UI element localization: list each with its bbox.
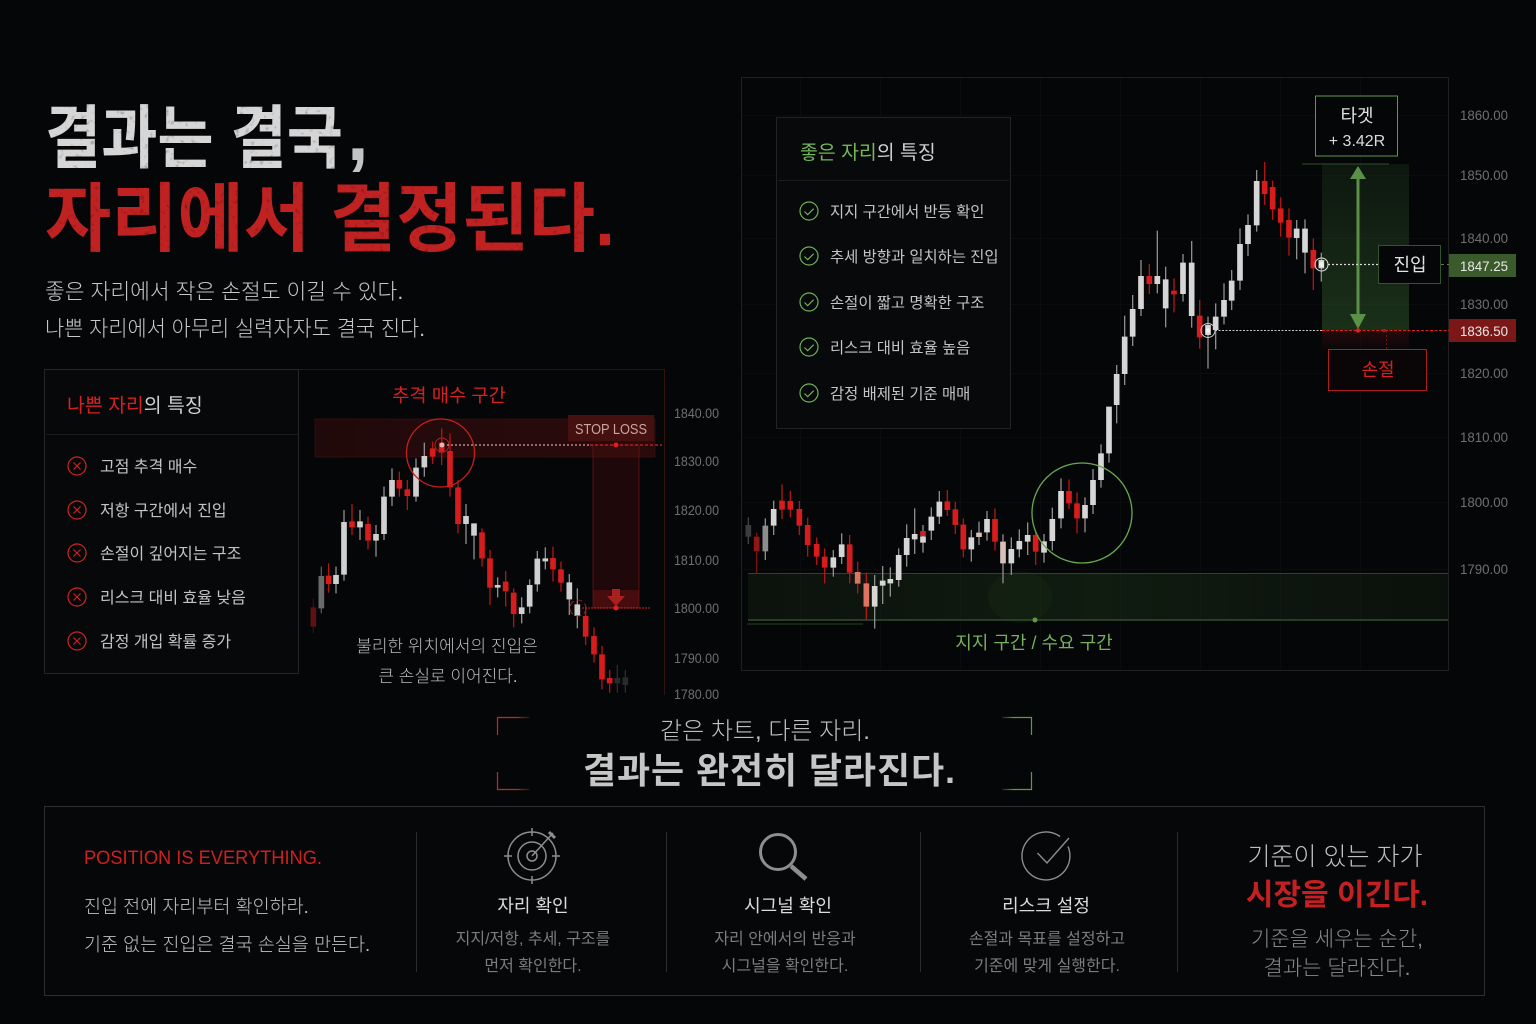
caption — [356, 637, 538, 686]
icon: target — [504, 828, 560, 884]
subtitle text: 나쁜 자리에서 아무리 실력자자도 결국 진다. — [45, 317, 425, 341]
bad traits list: 감정 개입 확률 증가 — [100, 633, 231, 651]
position message: 진입 전에 자리부터 확인하라. — [84, 896, 309, 917]
bad traits list: 리스크 대비 효율 낮음 — [100, 589, 246, 607]
right price axis: 1860.00 — [1460, 107, 1508, 123]
step: position: 자리 확인 — [497, 896, 569, 916]
caption: 불리한 위치에서의 진입은 — [356, 637, 538, 656]
closing message: 기준을 세우는 순간, — [1251, 928, 1423, 951]
closing message — [1246, 843, 1428, 980]
right price axis: 1820.00 — [1460, 365, 1508, 381]
target box: 타겟 — [1340, 106, 1374, 126]
entry marker and stop line — [406, 419, 662, 616]
title: 결과는 결국 — [45, 100, 343, 177]
bad traits list: 손절이 깊어지는 구조 — [100, 545, 241, 563]
icon: check — [1022, 832, 1070, 880]
position message: POSITION IS EVERYTHING. — [84, 848, 322, 869]
closing message: 기준이 있는 자가 — [1248, 843, 1422, 871]
right price axis: 1800.00 — [1460, 494, 1508, 510]
grid — [742, 78, 1448, 670]
good traits list: 리스크 대비 효율 높음 — [830, 339, 970, 357]
center statement — [498, 718, 1032, 791]
target box: + 3.42R — [1329, 133, 1385, 150]
heading: 나쁜 자리의 특징 — [67, 395, 203, 417]
bad traits list: 저항 구간에서 진입 — [100, 502, 227, 520]
stop box — [1328, 350, 1426, 390]
statement line 1: 같은 차트, 다른 자리. — [660, 718, 870, 745]
step: position: 먼저 확인한다. — [484, 957, 582, 975]
chart frame — [299, 370, 664, 695]
price tag: entry — [1449, 254, 1516, 277]
caption: 큰 손실로 이어진다. — [378, 667, 518, 686]
left price axis — [674, 405, 719, 702]
left price axis: 1780.00 — [674, 686, 719, 702]
green circle highlight — [1032, 463, 1132, 563]
stop loss tag — [568, 415, 654, 441]
step: risk: 리스크 설정 — [1002, 896, 1090, 916]
title: 자리에서 결정된다. — [45, 177, 615, 261]
closing message: 결과는 달라진다. — [1264, 957, 1410, 980]
good traits list: 감정 배제된 기준 매매 — [830, 385, 970, 403]
price tag: stop — [1449, 319, 1516, 342]
entry box — [1378, 246, 1440, 284]
step: signal: 자리 안에서의 반응과 — [714, 930, 856, 948]
bad traits list: 고점 추격 매수 — [100, 458, 197, 476]
right price axis: 1830.00 — [1460, 296, 1508, 312]
heading: 좋은 자리의 특징 — [800, 142, 936, 164]
step: position — [456, 896, 610, 975]
stop box: 손절 — [1361, 360, 1395, 380]
left price axis: 1840.00 — [674, 405, 719, 421]
panel: good position traits — [776, 118, 1010, 428]
left price axis: 1790.00 — [674, 650, 719, 666]
corner brackets: red — [498, 718, 530, 790]
good traits list: 추세 방향과 일치하는 진입 — [830, 248, 999, 266]
left price axis: 1810.00 — [674, 552, 719, 568]
step: position: 지지/저항, 추세, 구조를 — [456, 930, 610, 948]
position message — [84, 848, 370, 955]
right price axis: 1840.00 — [1460, 230, 1508, 246]
support zone label: 지지 구간 / 수요 구간 — [955, 633, 1113, 653]
position message: 기준 없는 진입은 결국 손실을 만든다. — [84, 934, 370, 955]
step: signal: 시그널을 확인한다. — [722, 957, 848, 975]
chase-buy label: 추격 매수 구간 — [392, 385, 506, 406]
subtitle text: 좋은 자리에서 작은 손절도 이길 수 있다. — [45, 280, 403, 304]
icon: green checks — [800, 202, 818, 402]
good traits list: 지지 구간에서 반등 확인 — [830, 203, 984, 221]
right price axis: 1790.00 — [1460, 561, 1508, 577]
left price axis: 1820.00 — [674, 502, 719, 518]
stop-loss risk block — [593, 445, 639, 608]
good traits list — [830, 203, 999, 403]
entry box: 진입 — [1393, 255, 1427, 275]
candlesticks: upper section — [1117, 162, 1321, 423]
right price axis: 1810.00 — [1460, 429, 1508, 445]
arrow: target range — [1302, 164, 1389, 329]
left price axis: 1800.00 — [674, 600, 719, 616]
arrow: stop-loss direction — [607, 589, 625, 606]
title — [45, 89, 615, 261]
price tag: stop: 1836.50 — [1460, 323, 1508, 339]
left price axis: 1830.00 — [674, 453, 719, 469]
price tag: entry: 1847.25 — [1460, 258, 1508, 274]
title: , — [347, 89, 369, 177]
panel: bad position traits — [44, 370, 298, 674]
panel: bottom summary — [44, 806, 1484, 996]
resistance band — [315, 419, 655, 457]
corner brackets: green — [1002, 718, 1032, 790]
candlesticks: falling trend — [313, 428, 625, 693]
bad traits list — [100, 458, 246, 651]
closing message: 시장을 이긴다. — [1246, 879, 1428, 912]
right price axis — [1460, 107, 1508, 577]
entry and stop lines — [1201, 258, 1449, 349]
step: signal: 시그널 확인 — [744, 896, 832, 916]
icon: red x marks — [68, 457, 86, 650]
stop zone — [1322, 330, 1409, 352]
panel: good position chart — [742, 78, 1516, 670]
stop loss tag: STOP LOSS — [575, 421, 647, 438]
statement line 2: 결과는 완전히 달라진다. — [583, 750, 955, 791]
step: risk: 손절과 목표를 설정하고 — [969, 930, 1125, 948]
candlesticks: lower section — [748, 407, 1109, 629]
subtitle text — [45, 280, 425, 341]
step: risk: 기준에 맞게 실행한다. — [974, 957, 1120, 975]
right price axis: 1850.00 — [1460, 167, 1508, 183]
support zone — [747, 571, 1448, 624]
step: signal — [714, 896, 856, 975]
panel: bad position chart — [299, 370, 719, 702]
step: risk — [969, 896, 1125, 975]
good traits list: 손절이 짧고 명확한 구조 — [830, 294, 984, 312]
icon: magnifier — [760, 834, 806, 879]
target zone — [1322, 164, 1409, 330]
target box — [1316, 96, 1398, 156]
